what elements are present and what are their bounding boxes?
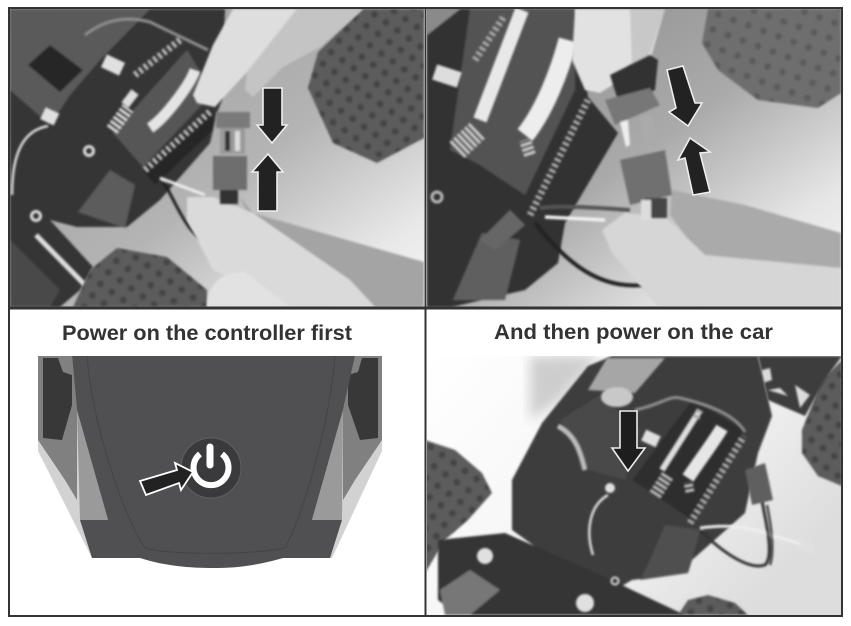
- shadow: [530, 356, 600, 420]
- connector plugs: [605, 55, 672, 220]
- lighter inserts: [77, 410, 108, 520]
- small plug: [432, 64, 462, 88]
- small plugs: [40, 54, 125, 125]
- wheel left: [425, 440, 492, 573]
- hands: [572, 9, 841, 307]
- arrow pair: [252, 88, 287, 211]
- hands: [187, 9, 424, 307]
- tire top right: [702, 9, 841, 108]
- battery strips: [432, 10, 655, 285]
- bottom wheel: [678, 595, 748, 615]
- tire top right: [308, 9, 424, 163]
- panel: connect plugs, arrows apart: [427, 9, 841, 307]
- arrow pair: [667, 66, 710, 195]
- rear arm cutouts: [755, 368, 810, 408]
- battery strips: [12, 19, 215, 285]
- car chassis: [438, 356, 772, 615]
- car chassis: [427, 9, 618, 307]
- arrow on switch: [612, 411, 645, 471]
- grip slots: [43, 358, 72, 440]
- controller body: [72, 356, 355, 568]
- power icon: [194, 447, 228, 485]
- panel: controller illustration: [38, 356, 382, 568]
- panel: car photo: [425, 356, 842, 615]
- connector plugs: [213, 112, 250, 204]
- car chassis: [10, 9, 225, 307]
- tire bottom: [73, 248, 207, 307]
- body seam: [87, 356, 335, 553]
- wheel right: [802, 360, 842, 486]
- strips and wires: [558, 397, 805, 584]
- white plugs: [477, 430, 816, 612]
- controller side grips: [38, 356, 100, 558]
- heading: controller: Power on the controller first: [62, 322, 352, 345]
- power button: [181, 438, 241, 498]
- rear arm: [758, 356, 842, 416]
- arrow to power button: [140, 463, 193, 495]
- connector on lead: [745, 463, 773, 505]
- motor fins: [588, 358, 665, 393]
- heading: car: And then power on the car: [494, 321, 773, 344]
- panel: connect plugs, arrows near contact: [10, 9, 424, 307]
